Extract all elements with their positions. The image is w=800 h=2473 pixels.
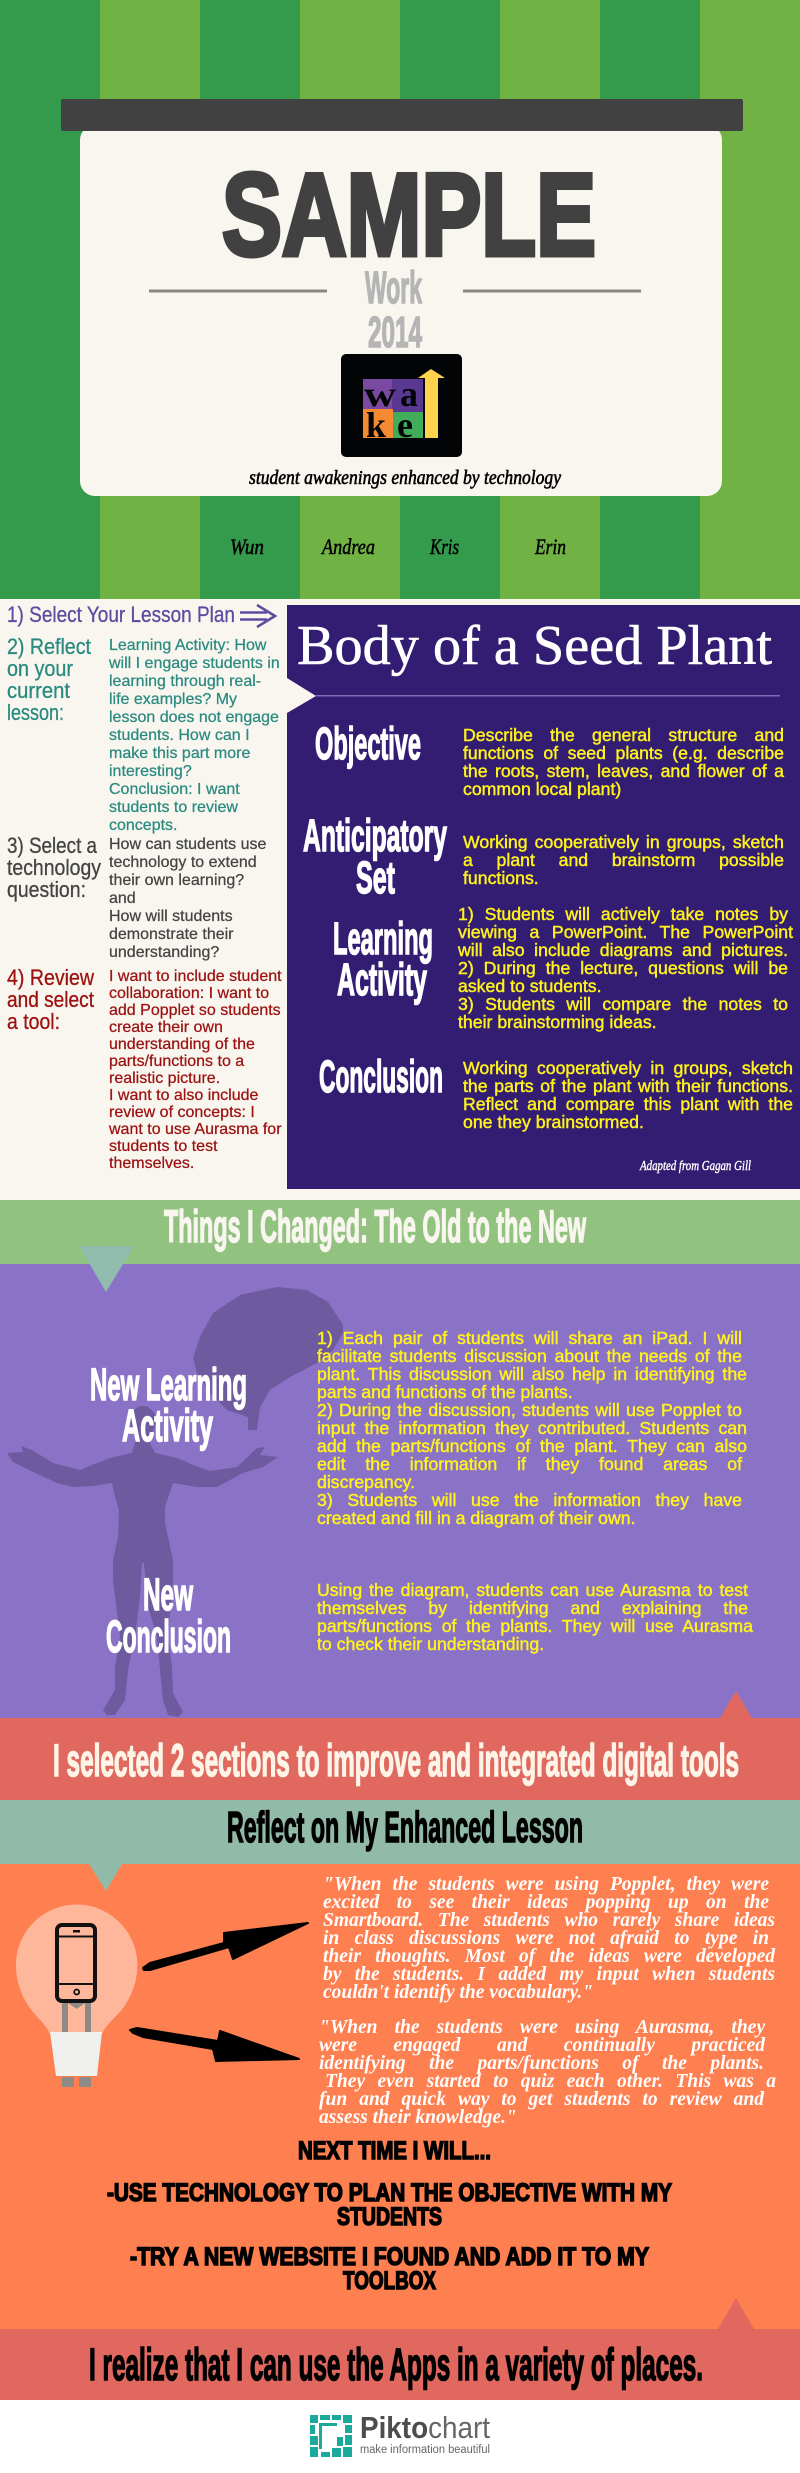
text: new learning activity description: add the parts/functions of the plant. They can also [317,1436,747,1456]
step 2 heading: lesson: [7,700,64,725]
text: Popplet quote: couldn't identify the vocabulary." [323,1982,593,2003]
step 4 body: review of concepts: I [109,1104,255,1121]
text: new learning activity description: parts and functions of the plants. [317,1382,573,1402]
step 4 body: I want to include student [109,968,282,985]
panel: purple Things I Changed body [0,1264,800,1718]
text: Popplet quote: in class discussions were not afraid to type in [323,1928,769,1949]
text: Aurasma quote: assess their knowledge." [319,2107,517,2128]
text: new learning activity description: facilitate students discussion about the needs of the [317,1346,742,1366]
step 4 body [108,968,282,1172]
author names: Andrea [320,534,375,559]
text: next time item 1: STUDENTS [337,2203,442,2231]
step 2 heading [7,634,91,725]
text: next time heading: NEXT TIME I WILL... [298,2137,491,2165]
text: new learning activity description: input the information they contributed. Students can [317,1418,747,1438]
pointer triangle [79,1246,134,1292]
label: New Learning Activity [90,1359,247,1451]
text: Aurasma quote [319,2017,776,2128]
label: New Learning Activity: Activity [122,1400,213,1451]
step 2 body: lesson does not engage [109,709,279,726]
subtitle: 2014: 2014 [368,308,422,357]
step 4 heading: 4) Review [7,965,94,990]
text: new learning activity description [317,1328,747,1528]
panel: Body of a Seed Plant [287,605,800,1189]
text: new conclusion description [317,1580,754,1654]
step 2 heading: 2) Reflect [7,634,91,659]
label: Anticipatory Set: Anticipatory [303,810,447,861]
subtitle: Work: Work [365,262,422,313]
step 4 heading [7,965,94,1034]
step 2 body: Conclusion: I want [109,781,240,798]
text: anticipatory set description [462,832,784,888]
wordmark: Piktochart [360,2410,490,2445]
step 3 heading: technology [7,855,101,880]
logo: Piktochart footer [310,2410,490,2457]
text: Aurasma quote: were engaged and continually practiced [319,2035,765,2056]
step 2 body: make this part more [109,745,250,762]
text: Popplet quote: their thoughts. Most of the ideas were developed [323,1946,775,1967]
text: Aurasma quote: identifying the parts/functions of the plants. [319,2053,764,2074]
logo: wake: e [397,405,413,445]
text: new learning activity description: 1) Each pair of students will share an iPad. I will [317,1328,742,1348]
text: learning activity description: 3) Students will compare the notes to [458,994,788,1014]
text: conclusion description: one they brainstormed. [463,1112,644,1132]
text: Popplet quote: Smartboard. The students who rarely share ideas [323,1910,775,1931]
text: new learning activity description: 2) During the discussion, students will use Popplet to [317,1400,742,1420]
author names: Kris [429,534,459,559]
step 2 body: life examples? My [109,691,237,708]
banner: I realize [0,2298,800,2400]
text: new learning activity description: plant. This discussion will also help in identifying the [317,1364,747,1384]
panel: orange reflection [0,1864,800,2329]
text: new conclusion description: to check their understanding. [317,1634,544,1654]
arrow: to second quote [130,2028,299,2061]
step 3 heading: 3) Select a [7,833,98,858]
logo: wake: a [400,374,418,414]
text: learning activity description: asked to students. [458,976,602,996]
text: learning activity description: their brainstorming ideas. [458,1012,657,1032]
step 3 body: How will students [109,908,233,925]
step 3 heading: question: [7,877,86,902]
banner: Things I Changed [0,1200,800,1292]
step 3 body [109,836,267,961]
logo: wake: w [364,374,396,414]
pointer triangle [89,1864,122,1891]
tagline: student awakenings enhanced by technology [249,467,561,489]
logo: wake [341,354,462,457]
author names: Erin [534,534,566,559]
text: Popplet quote [323,1874,776,2003]
text: new learning activity description: created and fill in a diagram of their own. [317,1508,636,1528]
text: next time item 2 [130,2243,649,2295]
logo: wake: k [366,405,386,445]
step 4 heading: and select [7,987,94,1012]
banner: Reflect on My Enhanced Lesson [0,1800,800,1891]
text: objective description: the roots, stem, leaves, and flower of a [463,761,784,781]
text: new learning activity description: 3) Students will use the information they have [317,1490,742,1510]
step 2 body: interesting? [109,763,192,780]
text: conclusion description: Reflect and compare this plant with the [463,1094,793,1114]
step 2 body: Learning Activity: How [109,637,267,654]
title: SAMPLE: SAMPLE [222,149,596,280]
step 3 body: understanding? [109,944,219,961]
arrow: to lesson plan [240,605,275,627]
author names: Wun [230,534,264,559]
text: next time item 2: TOOLBOX [343,2267,436,2295]
step 2 heading: current [7,678,70,703]
text: learning activity description: viewing a PowerPoint. The PowerPoint [458,922,793,942]
text: new learning activity description: edit the information if they found areas of [317,1454,742,1474]
text: Popplet quote: excited to see their ideas popping up on the [323,1892,769,1913]
icon: silhouette with brain [7,1287,343,1717]
step 4 body: realistic picture. [109,1070,220,1087]
label: Objective: Objective [315,718,421,769]
text: learning activity description: 2) During the lecture, questions will be [458,958,788,978]
step 4 body: create their own [109,1019,223,1036]
panel: title card [61,99,743,496]
banner: I selected 2 sections [0,1691,800,1800]
step 2 heading: on your [7,656,73,681]
icon: light bulb with phone [16,1904,137,2087]
step 2 body: learning through real- [109,673,261,690]
step 2 body: will I engage students in [108,655,280,672]
text: anticipatory set description: Working cooperatively in groups, sketch [463,832,784,852]
panel: green striped header background [0,0,800,600]
arrow: to first quote [143,1923,308,1970]
text: learning activity description [458,904,794,1032]
step 2 body [108,637,280,834]
step 3 body: their own learning? [109,872,244,889]
text: conclusion description: the parts of the plant with their functions. [463,1076,793,1096]
label: New Conclusion [106,1569,231,1662]
step 3 body: technology to extend [109,854,257,871]
text: new conclusion description: themselves by identifying and explaining the [317,1598,748,1618]
step 3 body: demonstrate their [109,926,234,943]
step 4 body: understanding of the [109,1036,255,1053]
label: New Learning Activity: New Learning [90,1359,247,1410]
step 2 body: concepts. [109,817,177,834]
credit: Adapted from Gagan Gill [639,1159,751,1174]
author names [230,534,566,559]
label: Learning Activity: Activity [337,954,427,1005]
text: new conclusion description: parts/functions of the plants. They will use Aurasma [317,1616,753,1636]
text: new learning activity description: discrepancy. [317,1472,415,1492]
text: anticipatory set description: functions. [463,868,539,888]
label: New Conclusion: Conclusion [106,1611,231,1662]
step 4 body: themselves. [109,1155,194,1172]
tagline: make information beautiful [360,2444,490,2456]
text: objective description: common local plant) [463,779,621,799]
step 4 body: students to test [109,1138,218,1155]
step 2 body: students to review [109,799,238,816]
step 4 body: parts/functions to a [109,1053,244,1070]
step 2 body: students. How can I [109,727,250,744]
step 4 body: I want to also include [109,1087,259,1104]
text: Popplet quote: "When the students were using Popplet, they were [323,1874,769,1895]
text: conclusion description [462,1058,793,1132]
step 3 body: and [109,890,136,907]
text: Aurasma quote: They even started to quiz each other. This was a [325,2071,776,2092]
text: objective description: functions of seed plants (e.g. describe [463,743,784,763]
step 1 heading: 1) Select Your Lesson Plan [7,602,235,627]
panel: cream lesson planning column [0,599,800,1200]
label: New Conclusion: New [143,1569,194,1620]
text: anticipatory set description: a plant and brainstorm possible [463,850,784,870]
text: new conclusion description: Using the diagram, students can use Aurasma to test [317,1580,748,1600]
step 4 body: collaboration: I want to [109,985,269,1002]
label: Anticipatory Set: Set [356,852,395,903]
text: Popplet quote: by the students. I added my input when students [323,1964,775,1985]
text: next time item 2: -TRY A NEW WEBSITE I FOUND AND ADD IT TO MY [130,2243,649,2271]
heading: Body of a Seed Plant: Body of a Seed Plant [297,615,772,677]
text: next time item 1: -USE TECHNOLOGY TO PLAN THE OBJECTIVE WITH MY [107,2179,672,2207]
label: Learning Activity: Learning [333,913,433,964]
text: conclusion description: Working cooperatively in groups, sketch [463,1058,793,1078]
text: next time item 1 [107,2179,672,2231]
text: learning activity description: will also include diagrams and pictures. [458,940,788,960]
text: Aurasma quote: "When the students were using Aurasma, they [319,2017,765,2038]
text: learning activity description: 1) Students will actively take notes by [458,904,788,924]
label: Conclusion: Conclusion [319,1051,443,1102]
text: Aurasma quote: fun and quick way to get students to review and [319,2089,764,2110]
step 3 heading [7,833,101,902]
text: objective description [463,725,784,799]
step 4 body: want to use Aurasma for [108,1121,282,1138]
step 4 body: add Popplet so students [109,1002,281,1019]
label: Anticipatory Set [303,810,447,903]
label: Learning Activity [333,913,433,1005]
icon: Piktochart mark [310,2415,352,2457]
step 4 heading: a tool: [7,1009,60,1034]
text: objective description: Describe the general structure and [463,725,784,745]
step 3 body: How can students use [109,836,267,853]
